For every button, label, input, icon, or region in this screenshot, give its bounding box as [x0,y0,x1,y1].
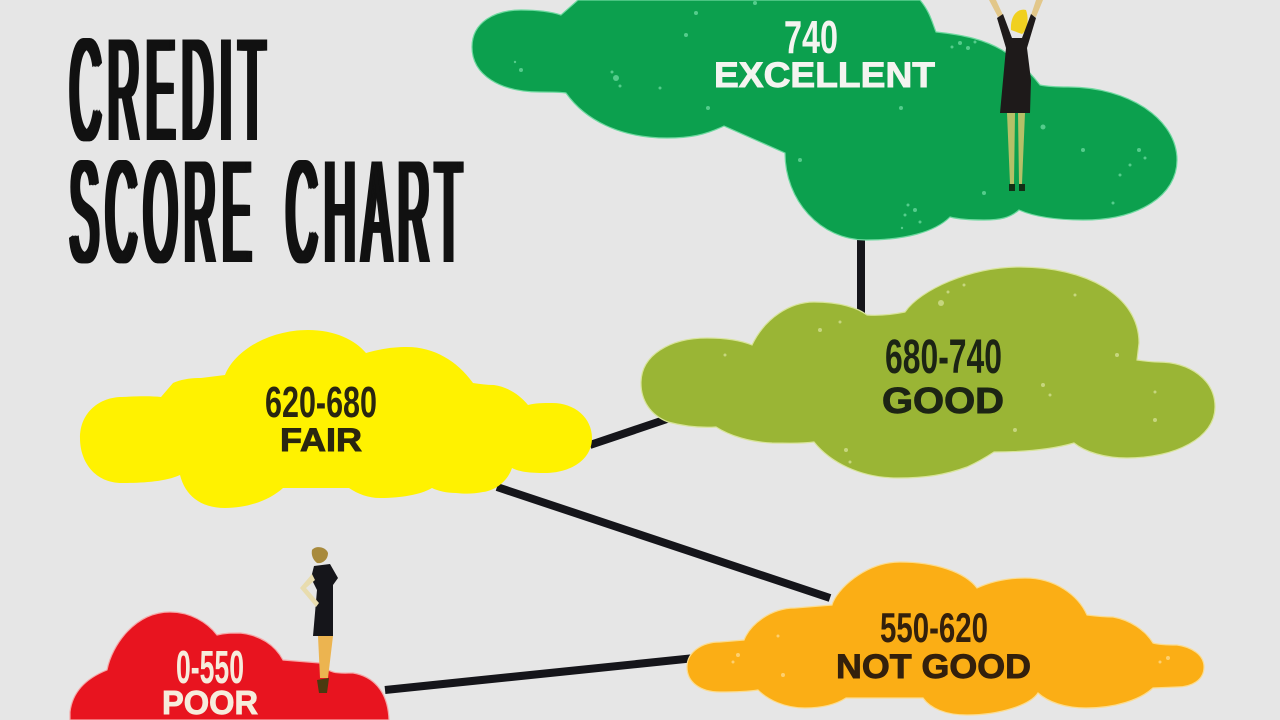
score label: EXCELLENT [714,56,935,95]
specks [514,1,1146,229]
cloud: poor [70,612,389,720]
score label: NOT GOOD [836,648,1031,686]
connector lines [385,235,861,690]
score label: POOR [162,684,258,720]
score label [714,11,935,95]
cloud: not good [687,562,1204,715]
specks [732,634,1170,677]
score label [836,604,1031,686]
score label: 550-620 [880,604,988,651]
cloud: fair [80,330,592,508]
cloud: good [641,267,1215,478]
figure: woman standing on poor cloud [300,547,338,693]
score label: 680-740 [885,331,1002,384]
cloud: excellent [472,0,1177,240]
score label [882,331,1004,421]
title: SCORE CHART [67,130,466,293]
score label: 0-550 [176,641,244,693]
score label: GOOD [882,380,1004,421]
score label [265,378,377,458]
specks [724,284,1157,464]
score label: 620-680 [265,378,377,427]
title [67,8,466,293]
score label: FAIR [280,422,362,458]
title: CREDIT [67,8,269,171]
score label [162,641,258,720]
figure: woman celebrating on excellent cloud [989,0,1043,191]
score label: 740 [784,11,838,63]
